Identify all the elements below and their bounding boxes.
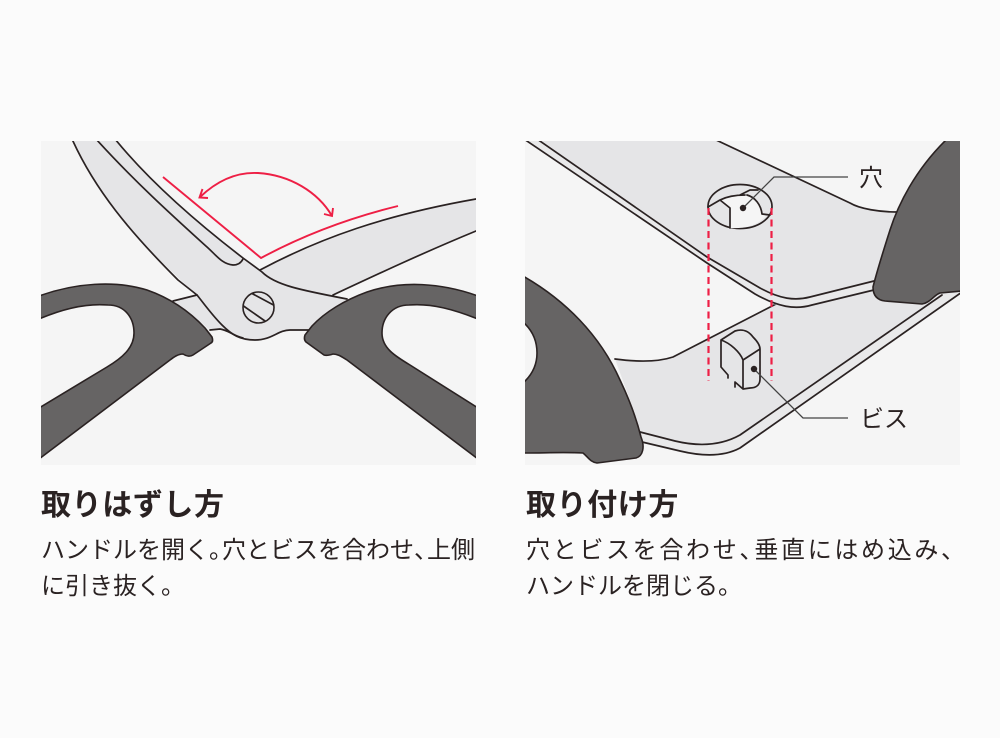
label: hole: 穴: [859, 165, 883, 192]
heading: removal: 取りはずし方: [41, 489, 225, 522]
text block: attachment steps: ハンドルを閉じる。: [526, 573, 742, 600]
right scissor blade: [260, 198, 476, 296]
upper blade: [524, 139, 897, 308]
text block: removal steps: に引き抜く。: [41, 573, 185, 600]
screw part: [721, 330, 760, 389]
screw: [243, 292, 274, 323]
text block: removal steps: ハンドルを開く。穴とビスを合わせ、上側: [41, 537, 475, 564]
leader line: hole: [740, 177, 848, 211]
panel: removal illustration: [39, 139, 478, 465]
left scissor blade: [72, 139, 347, 340]
red dashed alignment guides: [708, 208, 772, 381]
text block: attachment steps: [526, 537, 968, 600]
lower blade: [615, 280, 962, 455]
panel: attachment illustration: [523, 139, 962, 465]
leader line: screw: [751, 366, 848, 418]
left handle: [39, 284, 213, 459]
text block: removal steps: [41, 537, 475, 600]
heading: attachment: 取り付け方: [526, 489, 679, 522]
text block: attachment steps: 穴とビスを合わせ、垂直にはめ込み、: [526, 537, 968, 564]
arrow: opening arc: [200, 173, 333, 216]
red open-angle guide line: [163, 177, 398, 258]
upper-right handle: [873, 139, 962, 304]
label: screw: ビス: [860, 406, 908, 433]
lower-left handle: [523, 276, 643, 463]
right handle: [304, 284, 478, 459]
hole: [708, 184, 772, 228]
